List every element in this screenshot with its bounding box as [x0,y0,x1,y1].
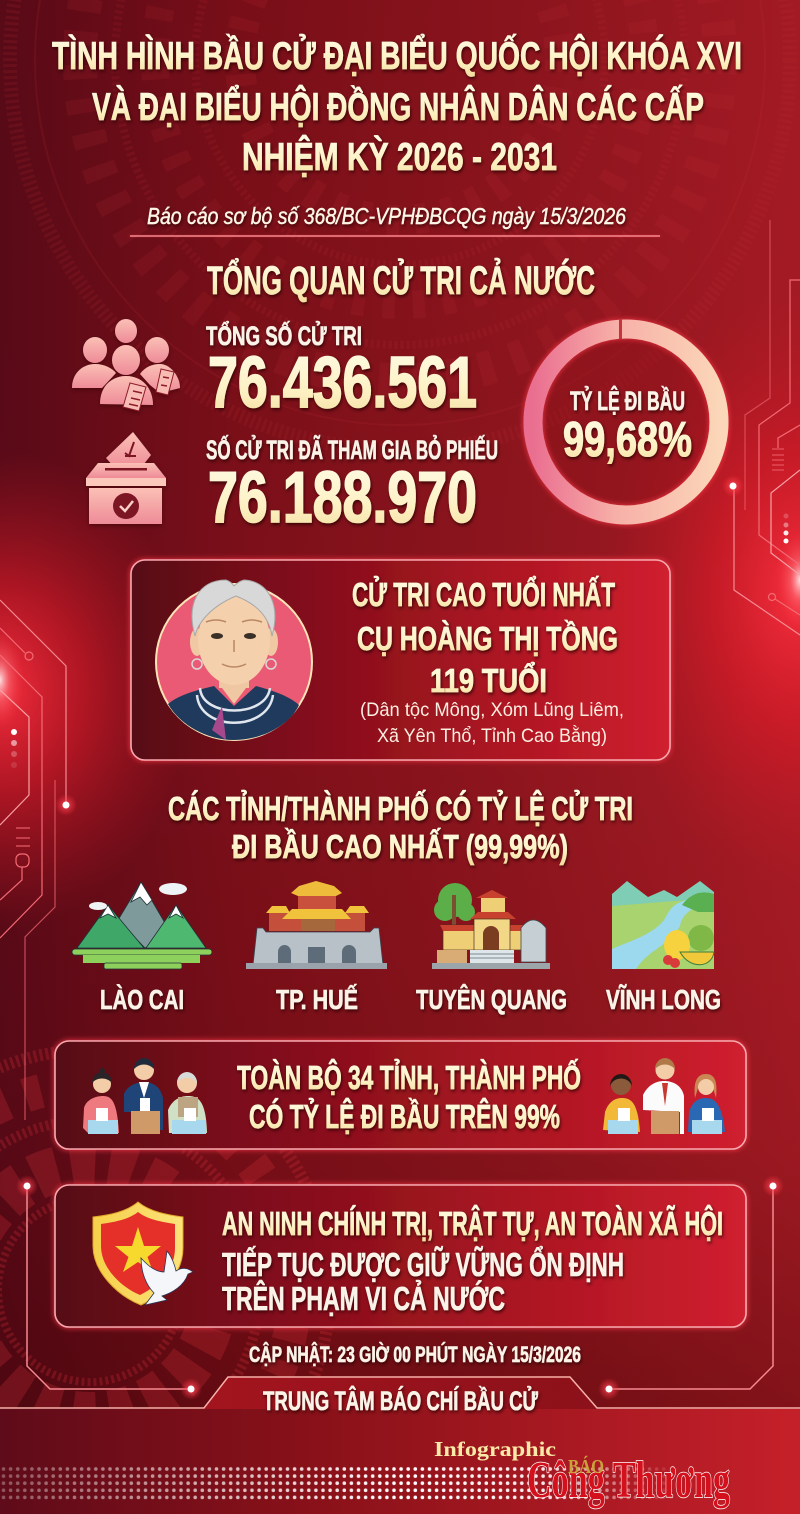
panel: oldest voter: CỤ HOÀNG THỊ TỒNG [357,620,618,657]
panel: all 34 provinces: CÓ TỶ LỆ ĐI BẦU TRÊN 99% [249,1098,560,1135]
logo: Infographic Báo Công Thương: BÁO [568,1455,604,1478]
panel: oldest voter: Xã Yên Thổ, Tỉnh Cao Bằng) [377,724,607,747]
labels: provinces: VĨNH LONG [606,984,721,1015]
panel: security: TIẾP TỤC ĐƯỢC GIỮ VỮNG ỔN ĐỊNH [222,1246,624,1283]
donut chart: turnout 99.68%: TỶ LỆ ĐI BẦU [570,384,685,416]
stat: voted [206,433,498,538]
stat: total voters: TỔNG SỐ CỬ TRI [206,319,362,351]
title [52,33,742,179]
icon: Vietnamese voters [83,1058,207,1134]
panel: all 34 provinces: TOÀN BỘ 34 TỈNH, THÀNH PHỐ [237,1058,581,1096]
stat: voted: 76.188.970 [208,458,477,538]
donut chart: turnout 99.68%: 99,68% [563,413,692,467]
circuit lines: right [734,220,800,635]
labels: provinces: LÀO CAI [100,984,184,1015]
bronze drum pattern: top [10,0,790,450]
icon: Tuyên Quang temple [432,883,550,969]
dotted band [2,1466,672,1500]
heading: highest turnout provinces: ĐI BẦU CAO NHẤT (99,99%) [232,828,568,865]
panel: security: TRÊN PHẠM VI CẢ NƯỚC [222,1280,505,1317]
logo: Infographic Báo Công Thương [434,1437,730,1509]
panel: oldest voter [131,560,670,760]
labels: provinces [100,984,721,1015]
circuit lines: left [0,600,66,1120]
circuit lines: bottom with nodes [0,1186,800,1408]
logo: Infographic Báo Công Thương: Infographic [434,1437,556,1461]
divider [130,235,660,237]
icon: Vĩnh Long river and fruit [612,881,714,969]
bronze drum pattern: bottom left [0,1046,333,1408]
icon: Huế citadel [246,881,387,969]
avatar: elderly woman [156,580,312,740]
footer tab label: TRUNG TÂM BÁO CHÍ BẦU CỬ [263,1384,538,1416]
footer tab shape [204,1377,597,1409]
icon: international voters [603,1058,725,1134]
panel: oldest voter: CỬ TRI CAO TUỔI NHẤT [352,576,615,613]
glowing nodes [16,475,784,1400]
icon: voters group [72,319,180,411]
icon: ballot box [86,432,166,524]
panel: oldest voter: (Dân tộc Mông, Xóm Lũng Liêm, [360,699,624,721]
panel: oldest voter: 119 TUỔI [430,662,547,699]
heading: highest turnout provinces [168,789,633,865]
update timestamp: CẬP NHẬT: 23 GIỜ 00 PHÚT NGÀY 15/3/2026 [249,1342,581,1367]
subtitle: Báo cáo sơ bộ số 368/BC-VPHĐBCQG ngày 15/3/2026 [147,203,626,229]
icon: shield with star and dove [93,1202,193,1305]
stat: total voters [206,319,477,423]
panel: all 34 provinces [55,1041,746,1149]
stat: voted: SỐ CỬ TRI ĐÃ THAM GIA BỎ PHIẾU [206,433,498,465]
title: NHIỆM KỲ 2026 - 2031 [242,135,557,179]
panel: security [55,1185,746,1327]
icon: Lào Cai mountains [72,882,212,969]
donut chart: turnout 99.68% [532,319,720,516]
labels: provinces: TP. HUẾ [276,984,358,1015]
labels: provinces: TUYÊN QUANG [416,984,567,1015]
heading: overview: TỔNG QUAN CỬ TRI CẢ NƯỚC [207,256,595,303]
heading: highest turnout provinces: CÁC TỈNH/THÀNH PHỐ CÓ TỶ LỆ CỬ TRI [168,789,633,827]
stat: total voters: 76.436.561 [208,343,477,423]
